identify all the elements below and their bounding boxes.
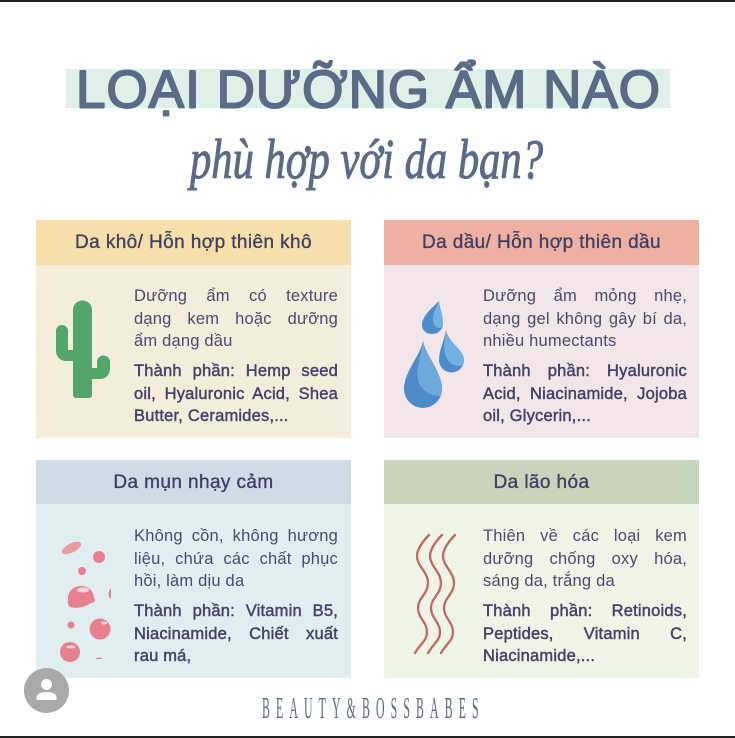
brand name: BEAUTY&BOSSBABES (262, 692, 479, 726)
text: oily skin ingredients (482, 362, 688, 425)
text: oily skin advice: dạng gel không gây bí da, (483, 310, 687, 328)
heading: sensitive acne skin (36, 460, 351, 504)
text: oily skin advice (483, 287, 687, 350)
text: aging skin advice: Thiên về các loại kem (483, 527, 687, 545)
heading: dry skin: Da khô/ Hỗn hợp thiên khô (75, 232, 312, 253)
subtitle: phù hợp với da bạn? (187, 129, 543, 191)
text: dry skin advice: Dưỡng ẩm có texture (134, 287, 338, 305)
text: sensitive skin ingredients: Niacinamide, Chiết xuất (134, 624, 338, 642)
text: dry skin advice: dạng kem hoặc dưỡng (134, 310, 338, 328)
text: sensitive skin advice (134, 527, 338, 590)
text: sensitive skin ingredients: Thành phần: Vitamin B5, (134, 602, 338, 620)
text: oily skin ingredients: Acid, Niacinamide, Jojoba (483, 384, 687, 402)
text: aging skin advice: dưỡng chống oxy hóa, (483, 550, 687, 568)
heading: aging skin: Da lão hóa (494, 472, 589, 493)
panel: aging skin (384, 460, 699, 678)
icon: avatar (24, 668, 69, 713)
text: dry skin ingredients: oil, Hyaluronic Acid, Shea (134, 384, 338, 402)
icon: cactus (56, 300, 110, 398)
text: oily skin ingredients: oil, Glycerin,... (483, 407, 591, 425)
text: oily skin ingredients: Thành phần: Hyaluronic (483, 362, 687, 380)
text: aging skin ingredients: Thành phần: Retinoids, (483, 602, 687, 620)
text: dry skin ingredients: Thành phần: Hemp seed (134, 362, 338, 380)
text: aging skin ingredients: Niacinamide,... (483, 647, 595, 665)
text: sensitive skin advice: hồi, làm dịu da (134, 572, 244, 590)
panel: dry skin (36, 220, 351, 438)
panel: sensitive acne skin (36, 460, 351, 678)
text: dry skin advice (134, 287, 338, 350)
text: dry skin advice: ẩm dạng dầu (134, 332, 233, 350)
text: sensitive skin advice: liệu, chứa các chất phục (134, 550, 338, 568)
text: dry skin ingredients (134, 362, 338, 425)
text: aging skin advice (483, 527, 687, 590)
text: oily skin advice: nhiều humectants (483, 332, 616, 350)
heading: dry skin (36, 220, 351, 265)
heading: oily skin (384, 220, 699, 265)
text: dry skin ingredients: Butter, Ceramides,... (134, 407, 289, 425)
icon: wrinkle waves (414, 534, 456, 654)
text: oily skin advice: Dưỡng ẩm mỏng nhẹ, (483, 287, 687, 305)
text: sensitive skin ingredients (134, 602, 338, 665)
panel: oily skin (384, 220, 699, 438)
icon: pimples (60, 542, 111, 662)
text: aging skin ingredients (483, 602, 687, 665)
heading: aging skin (384, 460, 699, 504)
heading: oily skin: Da dầu/ Hỗn hợp thiên dầu (422, 232, 661, 253)
text: sensitive skin ingredients: rau má, (134, 647, 191, 665)
heading: sensitive acne skin: Da mụn nhạy cảm (113, 472, 274, 493)
title: LOẠI DƯỠNG ẨM NÀO (76, 60, 660, 120)
icon: water drops (404, 301, 464, 408)
text: sensitive skin advice: Không cồn, không hương (134, 527, 338, 545)
text: aging skin ingredients: Peptides, Vitamin C, (483, 624, 687, 642)
text: aging skin advice: sáng da, trắng da (483, 572, 615, 590)
